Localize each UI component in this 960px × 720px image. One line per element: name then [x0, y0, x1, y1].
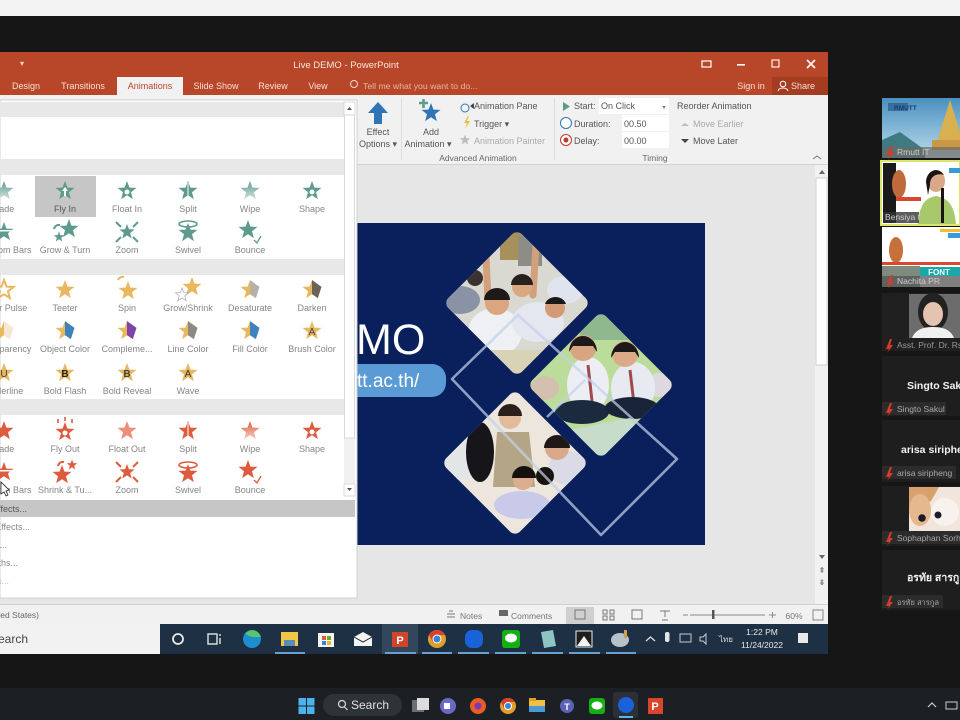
timing group: Timing: [642, 153, 668, 163]
timing group: Start:: [574, 101, 596, 111]
exit labels: Swivel: [175, 485, 201, 495]
participant tile: arisa siripheng: arisa siripheng: [897, 468, 953, 478]
animation pane group: [439, 101, 545, 163]
status bar: Comments: [511, 611, 552, 621]
animation pane group: Animation Pane: [474, 101, 538, 111]
emphasis labels: Compleme...: [101, 344, 153, 354]
pinned app icons: P: [651, 701, 659, 713]
emphasis labels: Spin: [118, 303, 136, 313]
emphasis labels: Line Color: [167, 344, 209, 354]
tray battery: [946, 702, 957, 709]
exit labels: Shrink & Tu...: [38, 485, 92, 495]
animation pane group: Advanced Animation: [439, 153, 517, 163]
entrance labels: Split: [179, 204, 197, 214]
ribbon body: Options ▾: [359, 139, 397, 149]
timing group: On Click: [601, 101, 636, 111]
photo: teacher with pupils: [444, 392, 586, 534]
timing group: [560, 98, 669, 163]
exit labels: Split: [179, 444, 197, 454]
emphasis labels: Brush Color: [288, 344, 336, 354]
exit labels: Zoom: [115, 485, 139, 495]
emphasis labels: Teeter: [52, 303, 78, 313]
participant tile: Thai name: อรทัย สารกูล: [897, 598, 939, 607]
timing group: Delay:: [574, 136, 600, 146]
reorder animation group: [677, 101, 752, 146]
slide workspace: [0, 165, 815, 605]
ribbon tabs: Tell me what you want to do...: [363, 81, 477, 91]
entrance labels: Shape: [299, 204, 325, 214]
exit labels: Shape: [299, 444, 325, 454]
pinned app icons: [412, 692, 663, 718]
participant tile: Rmutt IT: [882, 98, 960, 160]
URL pill: tt.ac.th/: [357, 371, 420, 392]
reorder animation group: Reorder Animation: [677, 101, 752, 111]
entrance labels: Swivel: [175, 245, 201, 255]
participant tile: Nachita PR: Nachita PR: [897, 276, 940, 286]
title bar: ▾: [20, 59, 24, 68]
animation pane group: Animation Painter: [474, 136, 545, 146]
status bar: [0, 604, 828, 624]
icon: effect options arrow: [368, 102, 388, 124]
vertical scrollbar: ⇞: [819, 566, 825, 575]
icon: mouse cursor: [1, 482, 9, 496]
emphasis labels: Grow/Shrink: [163, 303, 213, 313]
ribbon body: [0, 95, 828, 165]
icon: add animation star: [419, 99, 441, 121]
animation gallery dropdown: [0, 100, 357, 598]
emphasis effects: B: [123, 369, 131, 380]
ribbon tabs: Slide Show: [193, 81, 239, 91]
reorder animation group: Move Later: [693, 136, 738, 146]
animation pane group: Trigger ▾: [474, 119, 510, 129]
emphasis labels: Bold Flash: [44, 386, 86, 396]
Windows 11 taskbar: [0, 688, 960, 720]
entrance labels: Wipe: [240, 204, 260, 214]
photo: pupils raising hands: [446, 232, 588, 374]
taskbar app icons: [173, 630, 629, 648]
emphasis labels: Desaturate: [228, 303, 272, 313]
status bar: 60%: [785, 611, 803, 621]
search pill: Search: [351, 698, 389, 712]
PowerPoint window: [0, 52, 828, 624]
ribbon tabs: Transitions: [61, 81, 105, 91]
taskbar app icons: P: [396, 635, 404, 647]
more effects menu: [0, 500, 355, 586]
entrance labels: [0, 204, 325, 255]
gallery section headers: [0, 102, 344, 415]
slide: [330, 223, 705, 545]
ribbon body: Animation ▾: [404, 139, 452, 149]
entrance effects: [0, 181, 322, 243]
emphasis labels: Darken: [297, 303, 327, 313]
selected Fly In highlight: [35, 176, 96, 217]
ribbon tabs: Review: [258, 81, 288, 91]
title bar: Live DEMO - PowerPoint: [293, 60, 399, 71]
entrance labels: Bounce: [235, 245, 265, 255]
pinned app icons: T: [564, 702, 570, 712]
participant tile: Sophaphan: Sophaphan Sorh: [897, 533, 960, 543]
emphasis labels: Bold Reveal: [103, 386, 151, 396]
exit labels: Fly Out: [50, 444, 80, 454]
timing group: Duration:: [574, 119, 611, 129]
browser top strip: [0, 0, 960, 16]
vertical scrollbar: [815, 165, 828, 605]
participant tile: Thai name: [882, 550, 960, 610]
system tray: ไทย: [718, 635, 733, 644]
exit labels: [0, 444, 325, 495]
timing group: 00.00: [624, 136, 647, 146]
timing group: 00.50: [624, 119, 647, 129]
emphasis effects: A: [309, 327, 316, 338]
participant tile: Nachita PR: FONT: [928, 268, 950, 277]
decorative outline diamond: [452, 315, 677, 535]
participant tile: Bensiya: Bensiya t: [885, 212, 921, 222]
ribbon tabs: Design: [12, 81, 40, 91]
participant tile: Sophaphan: [882, 486, 960, 546]
participant tile: Singto Sakul: Singto Sakul: [897, 404, 945, 414]
status bar: Notes: [460, 611, 482, 621]
photo: two girls reading: [530, 314, 672, 456]
emphasis labels: [0, 303, 336, 396]
search pill: [323, 694, 402, 716]
entrance labels: Fly In: [54, 204, 76, 214]
timing group: ▾: [662, 105, 666, 111]
entrance labels: Float In: [112, 204, 142, 214]
Windows taskbar inside the shared screen: [0, 624, 828, 654]
ribbon tabs: Sign in: [737, 81, 765, 91]
participant tile: Nachita PR: [882, 227, 960, 289]
exit labels: Bounce: [235, 485, 265, 495]
exit effects: [0, 417, 322, 483]
participant tile: Singto Sakul: [882, 356, 960, 417]
gallery scrollbar: [344, 102, 355, 496]
exit labels: Wipe: [240, 444, 260, 454]
emphasis effects: [0, 277, 322, 381]
ribbon body: Add: [423, 127, 439, 137]
exit labels: Float Out: [108, 444, 146, 454]
participant tile: Rmutt IT: RMUTT: [894, 105, 917, 112]
reorder animation group: Move Earlier: [693, 119, 744, 129]
system tray: 11/24/2022: [741, 640, 783, 650]
taskbar underlines: [275, 652, 636, 654]
vertical scrollbar: ⇟: [819, 578, 825, 587]
emphasis labels: Wave: [177, 386, 199, 396]
system tray: 1:22 PM: [746, 627, 778, 637]
participant tile: Rmutt IT: Rmutt IT: [897, 147, 930, 157]
tray caret: [928, 703, 936, 707]
ribbon tabs: Animations: [128, 81, 173, 91]
ribbon body: Effect: [367, 127, 390, 137]
ribbon tabs: [12, 77, 828, 95]
emphasis effects: A: [185, 369, 192, 380]
entrance labels: Grow & Turn: [40, 245, 90, 255]
emphasis effects: B: [61, 369, 69, 380]
emphasis effects: U: [0, 369, 8, 380]
ribbon tabs: Share: [791, 81, 815, 91]
title bar: [0, 52, 828, 95]
slide title: MO: [356, 316, 425, 364]
system tray: [646, 627, 808, 650]
emphasis labels: Fill Color: [232, 344, 268, 354]
participant tile: arisa siripheng: [882, 420, 960, 482]
participant tile: Asst. Prof. Dr.: [882, 293, 960, 353]
icon: Windows start: [298, 698, 314, 714]
ribbon tabs: View: [308, 81, 328, 91]
participant tile: Bensiya: [881, 161, 960, 225]
emphasis labels: Object Color: [40, 344, 90, 354]
entrance labels: Zoom: [115, 245, 139, 255]
